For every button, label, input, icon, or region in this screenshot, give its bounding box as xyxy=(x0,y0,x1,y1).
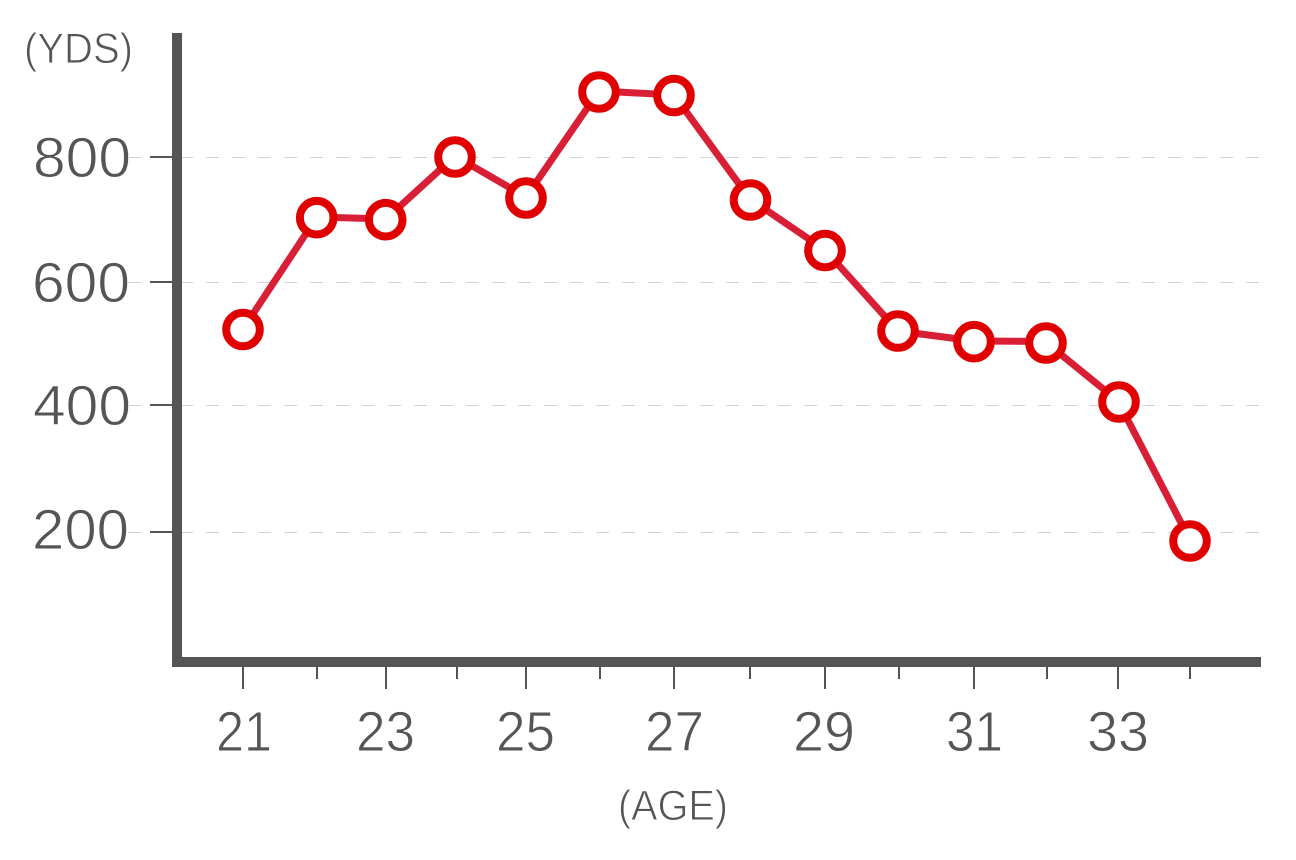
x axis ticks xyxy=(243,666,1190,689)
x axis labels: 27 xyxy=(645,700,704,764)
y axis labels: 200 xyxy=(32,498,129,562)
y axis labels: 800 xyxy=(33,126,131,190)
y axis labels: 400 xyxy=(33,374,131,438)
x axis labels: 33 xyxy=(1087,700,1149,764)
axes xyxy=(172,33,1261,667)
y axis unit: (YDS) xyxy=(24,25,133,73)
x axis labels: 21 xyxy=(216,700,272,764)
data points xyxy=(226,75,1207,558)
x axis labels: 31 xyxy=(946,700,1003,764)
x axis unit: (AGE) xyxy=(618,782,728,830)
y axis ticks xyxy=(150,157,172,532)
x axis labels xyxy=(216,700,1149,764)
y axis labels: 600 xyxy=(32,251,130,315)
x axis labels: 29 xyxy=(793,700,855,764)
x axis labels: 23 xyxy=(356,700,415,764)
data line xyxy=(243,91,1190,540)
x axis labels: 25 xyxy=(496,700,555,764)
y axis labels xyxy=(32,126,131,562)
